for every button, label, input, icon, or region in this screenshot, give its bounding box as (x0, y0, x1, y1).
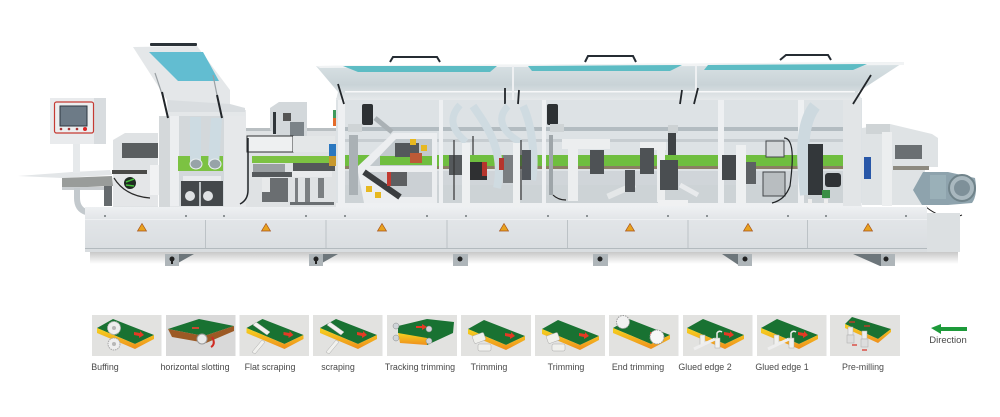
process step: Trimming: Trimming (471, 362, 507, 372)
process step: horizontal slotting: horizontal slotting (160, 362, 230, 372)
direction arrow: Direction (929, 335, 967, 346)
base cabinet (85, 207, 960, 252)
process step: scraping (313, 315, 382, 372)
process step: Glued edge 1: Glued edge 1 (755, 362, 809, 372)
feed table (18, 143, 113, 212)
process step: Buffing (91, 315, 162, 372)
scraping units (722, 138, 792, 203)
process step: scraping: scraping (321, 362, 355, 372)
main frame (336, 98, 862, 208)
pre-milling and glue section (240, 102, 338, 208)
buffing tower (159, 110, 246, 208)
process step: Flat scraping (240, 315, 309, 372)
process step: Pre-milling: Pre-milling (842, 362, 884, 372)
end trimming units (547, 104, 698, 206)
raised tower cover (133, 43, 245, 118)
main cover lids (316, 55, 904, 104)
direction arrow (929, 324, 967, 346)
process step: horizontal slotting (160, 315, 236, 372)
floor shadow (90, 252, 958, 264)
process step: Trimming (461, 315, 531, 372)
process step: Tracking trimming (385, 315, 457, 372)
process step: Buffing: Buffing (91, 362, 119, 372)
process step: Pre-milling (830, 315, 900, 372)
process step: End trimming (609, 315, 678, 372)
process step: Trimming: Trimming (548, 362, 584, 372)
process step: Tracking trimming: Tracking trimming (385, 362, 455, 372)
process step: End trimming: End trimming (612, 362, 664, 372)
process step: Trimming (535, 315, 605, 372)
edge banding machine (18, 43, 976, 266)
process step: Glued edge 1 (755, 315, 826, 372)
trimming units with hoses (449, 105, 534, 207)
process step: Flat scraping: Flat scraping (245, 362, 295, 372)
process step: Glued edge 2: Glued edge 2 (678, 362, 732, 372)
process step: Glued edge 2 (678, 315, 752, 372)
infeed module (104, 133, 160, 207)
buffing unit with hose and motor post (803, 106, 841, 204)
machine feet (165, 254, 895, 266)
outfeed module and motor (862, 124, 976, 217)
diagonal tracking unit (348, 104, 437, 203)
control panel (50, 98, 106, 144)
